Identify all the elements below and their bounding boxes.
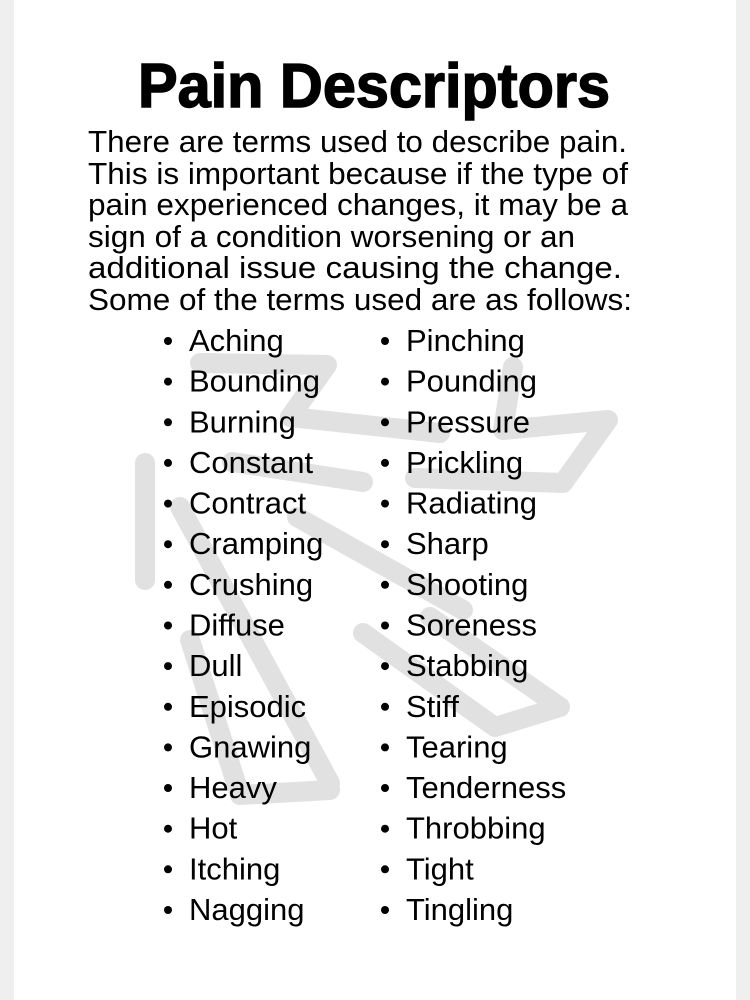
list: column 1: Dull: [189, 648, 242, 683]
list: column 1: Cramping: [189, 526, 323, 561]
list: column 2: Tingling: [406, 892, 513, 927]
list: column 1: Burning: [189, 404, 296, 439]
list: column 1: Contract: [189, 486, 307, 521]
list: column 2: Pounding: [406, 364, 537, 399]
list: column 1: Episodic: [189, 689, 306, 724]
title: Pain Descriptors: [138, 52, 610, 121]
list: column 1: Heavy: [189, 770, 277, 805]
list: column 2: Shooting: [406, 567, 528, 602]
watermark: lightning zigzag: [145, 363, 608, 795]
list: column 2: Radiating: [406, 486, 537, 521]
list: column 2: Stabbing: [406, 648, 528, 683]
list: column 1: Bounding: [189, 364, 320, 399]
intro paragraph: This is important because if the type of: [88, 156, 628, 191]
list: column 1: Aching: [189, 323, 284, 358]
list: column 2: Pressure: [406, 404, 530, 439]
list: column 2: Pinching: [406, 323, 525, 358]
intro paragraph: sign of a condition worsening or an: [88, 219, 575, 254]
list: column 2: Prickling: [406, 445, 523, 480]
list: column 2: Soreness: [406, 608, 537, 642]
list: column 1: Diffuse: [189, 608, 285, 642]
intro paragraph: [88, 124, 632, 317]
list: column 1: [164, 323, 323, 927]
list: column 2: Tight: [406, 851, 474, 886]
intro paragraph: pain experienced changes, it may be a: [88, 187, 629, 222]
intro paragraph: Some of the terms used are as follows:: [88, 282, 632, 317]
intro paragraph: additional issue causing the change.: [88, 250, 622, 285]
list: column 2: Stiff: [406, 689, 459, 724]
list: column 2: Sharp: [406, 526, 489, 561]
list: column 2: [381, 323, 566, 927]
list: column 1: Nagging: [189, 892, 304, 927]
intro paragraph: There are terms used to describe pain.: [88, 124, 627, 159]
list: column 1: Gnawing: [189, 729, 311, 764]
list: column 2: Tearing: [406, 729, 508, 764]
list: column 2: Throbbing: [406, 811, 546, 846]
list: column 1: Hot: [189, 811, 238, 846]
list: column 1: Crushing: [189, 567, 313, 602]
list: column 2: Tenderness: [406, 770, 566, 805]
list: column 1: Itching: [189, 851, 280, 886]
list: column 1: Constant: [189, 445, 313, 480]
